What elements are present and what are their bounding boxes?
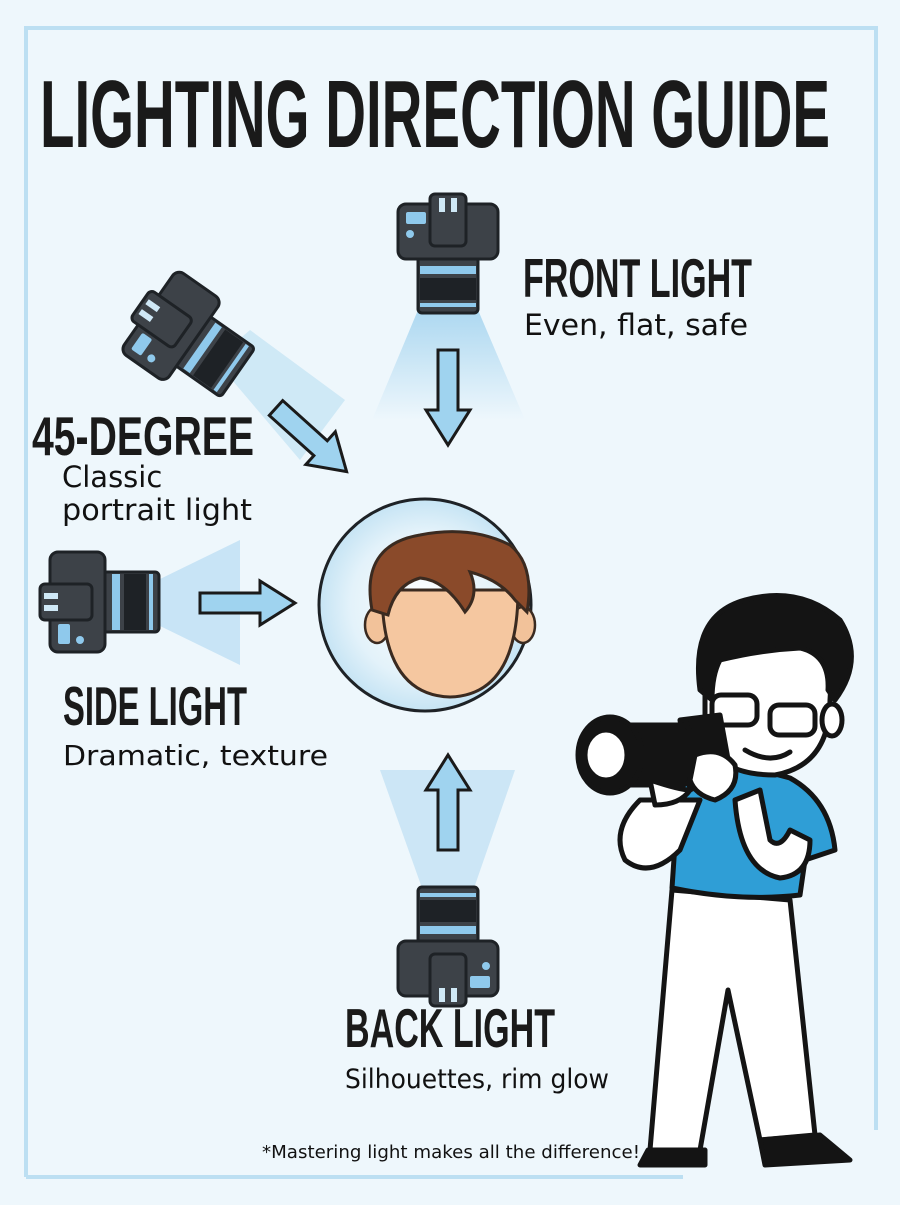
45-degree label: Classic bbox=[62, 460, 162, 494]
front light label: FRONT LIGHT bbox=[523, 247, 752, 309]
45-degree label: portrait light bbox=[62, 493, 252, 527]
side light label: SIDE LIGHT bbox=[63, 675, 247, 737]
back light label: Silhouettes, rim glow bbox=[345, 1064, 609, 1095]
arrow: side bbox=[200, 581, 295, 625]
icon: 45-degree camera bbox=[112, 263, 266, 414]
45-degree label bbox=[32, 405, 254, 527]
side light label bbox=[63, 675, 328, 772]
back light label: BACK LIGHT bbox=[345, 997, 555, 1059]
subject circle with face bbox=[319, 499, 535, 711]
45-degree label: 45-DEGREE bbox=[32, 405, 254, 467]
arrow: front down bbox=[426, 350, 470, 445]
beams bbox=[158, 310, 525, 888]
back light label bbox=[345, 997, 609, 1095]
icon: back camera bbox=[398, 887, 498, 1006]
icon: front camera bbox=[398, 194, 498, 313]
arrow: back up bbox=[426, 755, 470, 850]
arrow: 45 degree bbox=[261, 392, 361, 488]
icon: side camera bbox=[40, 552, 159, 652]
front light label: Even, flat, safe bbox=[524, 308, 748, 342]
footer note: *Mastering light makes all the difference! bbox=[262, 1142, 640, 1163]
front light label bbox=[523, 247, 752, 342]
side light label: Dramatic, texture bbox=[63, 739, 328, 772]
photographer illustration bbox=[578, 596, 851, 1165]
